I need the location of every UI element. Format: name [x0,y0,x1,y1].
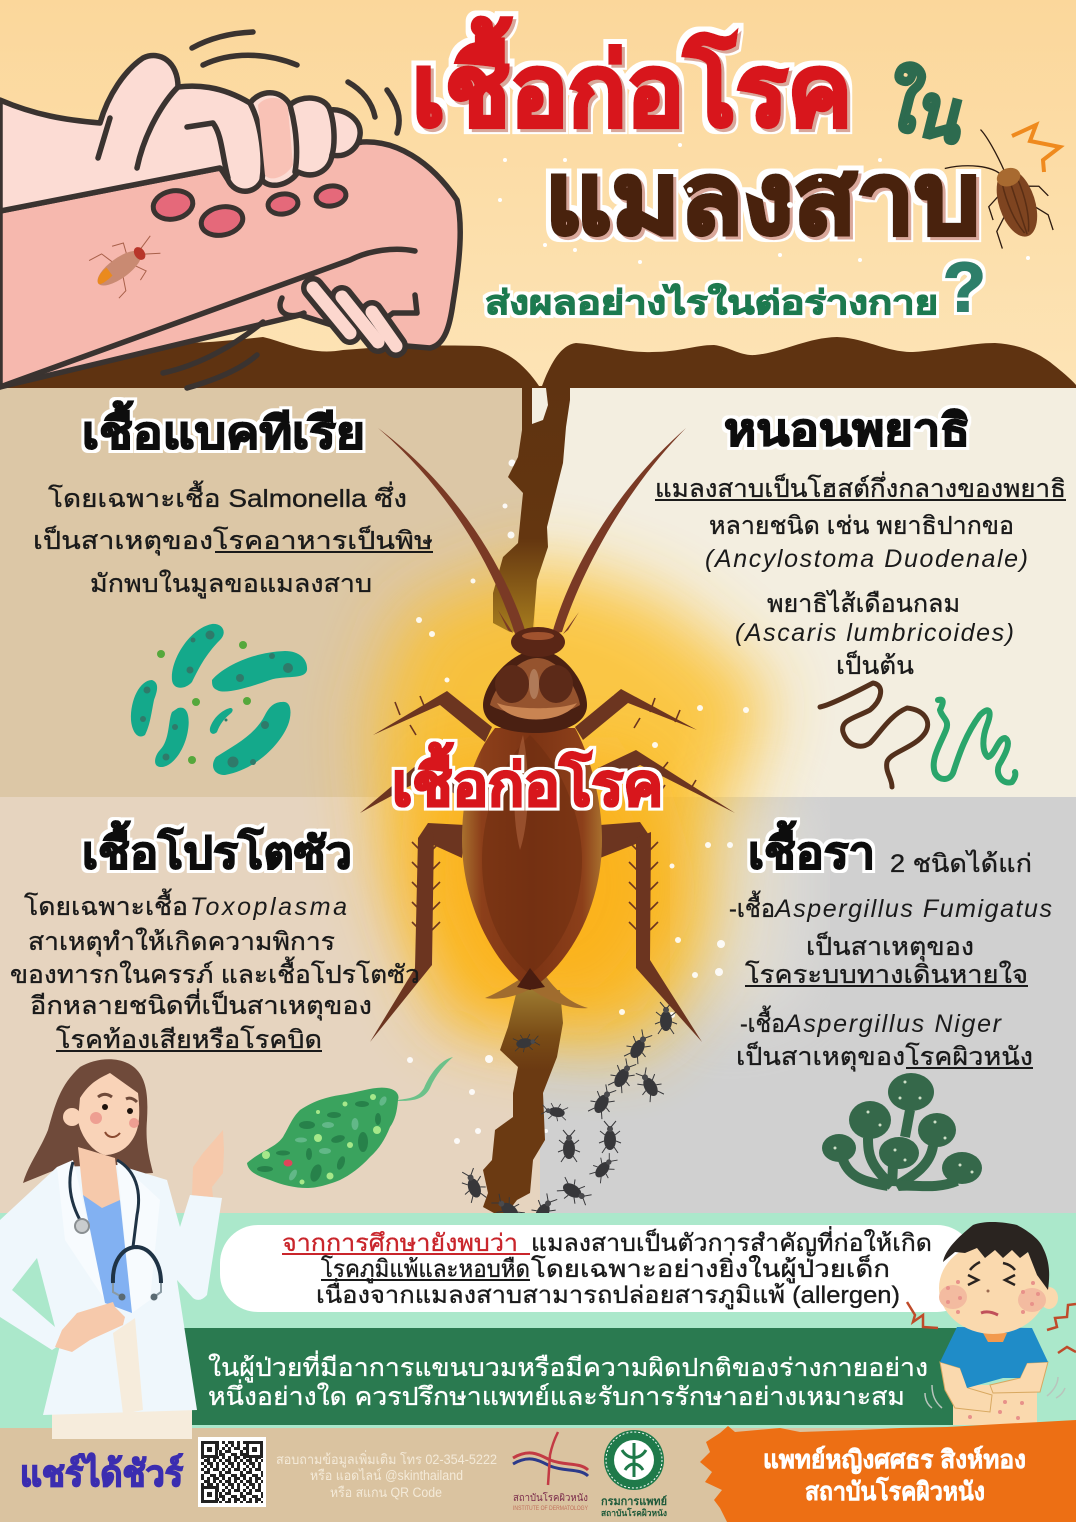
logo: institute of dermatology: INSTITUTE OF DERMATOLOGY [513,1506,588,1512]
center label: เชื้อก่อโรค [392,743,663,818]
crack in the ground [483,386,570,1218]
head [1040,1287,1058,1309]
body: อีกหลายชนิดที่เป็นสาเหตุของ [30,988,372,1021]
body: โดยเฉพาะเชื้อ [24,888,188,921]
logo: department of medical services: กรมการแพทย์ [601,1495,667,1508]
illustration: doctor [0,1059,224,1439]
stethoscope [70,1160,139,1247]
raised hand [192,1130,224,1197]
body: แมลงสาบเป็นโฮสต์กึ่งกลางของพยาธิ [655,471,1066,503]
callout: allergy finding: แมลงสาบเป็นตัวการสำคัญที่ก่อให้เกิด [531,1226,932,1257]
legs [360,689,735,1042]
title: cockroach: แมลงสาบ [545,143,980,255]
body: เป็นสาเหตุของโรคอาหารเป็นพิษ [33,525,433,556]
logo: institute of dermatology [513,1432,588,1512]
panel: bacteria text [33,400,433,599]
subtitle: ส่งผลอย่างไรในต่อร่างกาย [485,283,938,321]
body: เป็นสาเหตุของ [806,931,974,962]
icon: cockroach with spark [937,116,1060,258]
title: question mark: ? [943,248,986,326]
heading: เชื้อโปรโตซัว [82,820,352,878]
body: มักพบในมูลขอแมลงสาบ [90,569,372,599]
panel: worms text [655,406,1066,680]
leg spines [395,696,696,930]
armpit gap [12,1258,55,1327]
motion marks [192,32,399,133]
icon: fungus [822,1073,982,1186]
pronotum [483,650,587,733]
body: หลายชนิด เช่น พยาธิปากขอ [709,512,1014,540]
coat [0,1165,222,1415]
body: พยาธิไส้เดือนกลม [767,589,960,618]
lower arm [0,142,460,387]
icon: parasitic worms [820,683,1015,787]
callout: see a doctor: ในผู้ป่วยที่มีอาการแขนบวมหรือมีความผิดปกติของร่างกายอย่าง [208,1350,928,1383]
body: โรคท้องเสียหรือโรคบิด [56,1025,322,1054]
brown ground [0,337,1076,388]
body: เป็นต้น [836,650,914,680]
callout: allergy finding: เนื่องจากแมลงสาบสามารถปล่อยสารภูมิแพ้ (allergen) [316,1278,900,1310]
icon: cockroach on arm [84,223,169,303]
panel: protozoa background [0,797,540,1217]
inner finger shading [258,98,293,178]
hair [943,1222,1049,1290]
footer: author banner: แพทย์หญิงศศธร สิงห์ทอง [763,1445,1026,1474]
logo: department of medical services [601,1430,667,1518]
neck and face [78,1147,120,1212]
body: สาเหตุทำให้เกิดความพิการ [28,927,335,957]
panel: fungus background [540,797,1076,1217]
callout: allergy finding: โรคภูมิแพ้และหอบหืด [321,1255,530,1284]
head [511,627,565,657]
title: in: ใน [878,58,974,159]
callout: see a doctor [183,1328,958,1425]
panel: protozoa text [10,820,420,1054]
body: -เชื้อ [729,890,775,923]
panel: bacteria background [0,386,535,798]
cerci [485,975,588,1008]
body [729,890,1052,1072]
body: เป็นสาเหตุของโรคผิวหนัง [736,1041,1033,1072]
callout: allergy finding [220,1225,975,1312]
scattered white dots [407,460,749,1144]
body [655,471,1066,680]
body: Toxoplasma [190,893,347,921]
body [462,728,602,990]
icon: bacteria [131,624,307,775]
header background [0,0,1076,390]
body: Aspergillus Fumigatus [773,895,1052,923]
body [10,888,420,1054]
red rash spots [151,184,347,239]
trouser strip [113,1318,143,1414]
heading: เชื้อรา [748,820,875,878]
footer: contact text: หรือ แอดไลน์ @skinthailand [310,1467,463,1483]
heading: หนอนพยาธิ [724,406,970,455]
mint band [0,1213,1076,1430]
icon: protozoa [247,1057,453,1188]
body: โรคระบบทางเดินหายใจ [745,960,1028,989]
body: ของทารกในครรภ์ และเชื้อโปรโตซัว [10,956,420,989]
body: -เชื้อ [740,1005,785,1038]
footer background [0,1428,1076,1522]
trousers [52,1405,192,1439]
logo: department of medical services: สถาบันโรคผิวหนัง [601,1507,667,1518]
footer: contact text [276,1450,497,1500]
callout: see a doctor: หนึ่งอย่างใด ควรปรึกษาแพทย์และรับการรักษาอย่างเหมาะสม [208,1379,905,1411]
footer: author banner [700,1420,1076,1522]
collar lapels [57,1160,160,1313]
face [968,1262,1015,1285]
heading: เชื้อแบคทีเรีย [82,400,365,458]
body: Aspergillus Niger [783,1010,1003,1038]
panel: fungus text [729,820,1052,1072]
body: (Ascaris lumbricoides) [735,619,1014,647]
sub heading: 2 ชนิดได้แก่ [890,849,1032,878]
icon: QR code [198,1437,266,1507]
lower hand [55,1302,125,1352]
body: (Ancylostoma Duodenale) [705,545,1028,573]
scrubs [83,1195,132,1313]
upper hand and wrist [0,56,360,211]
tummy and arms [953,1385,1037,1425]
illustration: scratching arm with rash [0,32,460,388]
title: pathogens: เชื้อก่อโรค [412,17,852,147]
pain marks [907,1302,1076,1353]
illustration: boy with rash [907,1222,1076,1425]
antennae [378,428,686,634]
footer: contact text: สอบถามข้อมูลเพิ่มเติม โทร 02-354-5222 [276,1450,497,1468]
motion lines [925,1377,1065,1408]
footer: contact text: หรือ สแกน QR Code [330,1485,442,1500]
shirt [940,1327,1048,1388]
footer: share slogan: แชร์ได้ชัวร์ [20,1452,184,1494]
logo: institute of dermatology: สถาบันโรคผิวหนัง [513,1491,588,1504]
panel: parasitic worms background [535,386,1076,798]
inner crease [0,249,415,387]
fingers detail [98,87,334,180]
illustration: large cockroach [360,428,735,1042]
illustration: small cockroaches crawling [458,1002,677,1230]
hair [23,1059,153,1183]
callout: allergy finding: โดยเฉพาะอย่างยิ่งในผู้ป่วยเด็ก [531,1252,890,1284]
yellow dust glow [370,560,800,1050]
footer: author banner: สถาบันโรคผิวหนัง [805,1476,985,1506]
body: โดยเฉพาะเชื้อ Salmonella ซึ่ง [48,480,407,513]
rash dots [946,1280,1040,1420]
title dots [498,143,1030,264]
lower hand fingers [380,295,417,323]
body [33,480,433,599]
callout: allergy finding: จากการศึกษายังพบว่า [282,1230,518,1257]
